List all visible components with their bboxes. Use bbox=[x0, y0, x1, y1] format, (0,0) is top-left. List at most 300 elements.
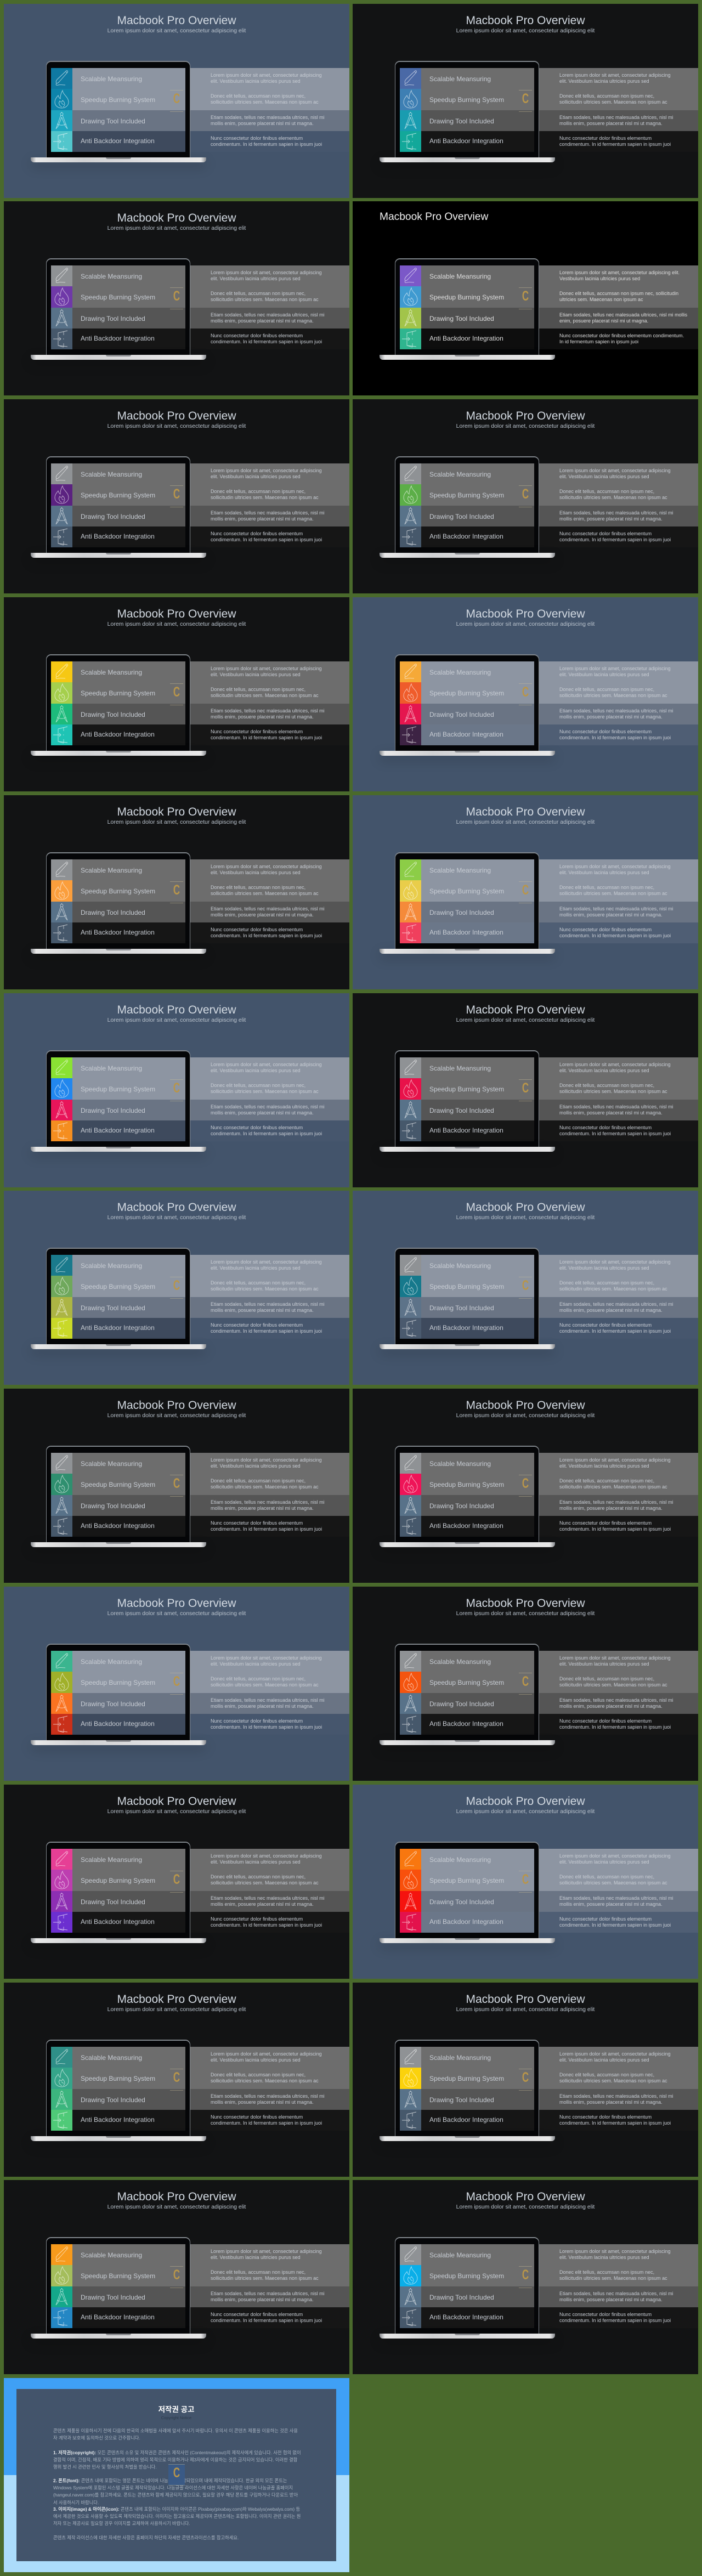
laptop bbox=[380, 2237, 555, 2339]
row: Anti Backdoor Integration: condimentum. In id fermentum sapien in ipsum juoi bbox=[559, 933, 671, 938]
heading: Macbook Pro Overview bbox=[466, 1993, 585, 2006]
row: Anti Backdoor Integration: In id fermentum sapien in ipsum juoi bbox=[559, 339, 638, 344]
row: Scalable Measuring: elit. Vestibulum lacinia ultricies purus sed bbox=[559, 1463, 649, 1469]
row: Speedup Burning System: sollicitudin ultricies sem. Maecenas non ipsum ac bbox=[211, 1682, 319, 1688]
row: Drawing Tool Included: mollis enim, posuere placerat nisl mi ut magna. bbox=[211, 318, 314, 324]
row: Speedup Burning System: Speedup Burning System bbox=[429, 96, 504, 104]
row: Scalable Measuring: elit. Vestibulum lacinia ultricies purus sed bbox=[559, 870, 649, 875]
row: Speedup Burning System: sollicitudin ultricies sem. Maecenas non ipsum ac bbox=[559, 1484, 667, 1490]
row: Anti Backdoor Integration: Nunc consectetur dolor finibus elementum bbox=[211, 135, 303, 141]
row: Anti Backdoor Integration bbox=[51, 1516, 349, 1537]
row: Anti Backdoor Integration: condimentum. In id fermentum sapien in ipsum juoi bbox=[211, 2120, 322, 2126]
row: Drawing Tool Included: Etiam sodales, tellus nec malesuada ultrices, nisl mi bbox=[559, 1499, 673, 1505]
row: Drawing Tool Included: mollis enim, posuere placerat nisl mi ut magna. bbox=[559, 121, 663, 126]
row: Anti Backdoor Integration: Nunc consectetur dolor finibus elementum bbox=[211, 1520, 303, 1526]
row: Scalable Measuring: elit. Vestibulum lacinia ultricies purus sed bbox=[211, 2057, 301, 2063]
row: Scalable Measuring: Scalable Meansuring bbox=[81, 867, 142, 874]
row: Speedup Burning System: sollicitudin ultricies sem. Maecenas non ipsum ac bbox=[211, 2078, 319, 2084]
row: Speedup Burning System bbox=[51, 880, 349, 902]
row: Anti Backdoor Integration: condimentum. In id fermentum sapien in ipsum juoi bbox=[211, 933, 322, 938]
panel: slide 15 bbox=[4, 1389, 349, 1583]
row: Anti Backdoor Integration: Anti Backdoor Integration bbox=[81, 137, 155, 145]
row: Anti Backdoor Integration bbox=[51, 329, 349, 349]
row: Drawing Tool Included bbox=[400, 1297, 698, 1318]
row: Anti Backdoor Integration: Anti Backdoor Integration bbox=[81, 1918, 155, 1926]
row: Scalable Measuring: Lorem ipsum dolor sit amet, consectetur adipiscing bbox=[559, 1457, 671, 1463]
watermark: C bbox=[522, 486, 529, 502]
row: Scalable Measuring bbox=[51, 1453, 349, 1474]
row: Drawing Tool Included: enim, posuere placerat nisl mi ut magna. bbox=[559, 318, 648, 324]
row: Drawing Tool Included bbox=[51, 1891, 349, 1912]
row: Speedup Burning System: Speedup Burning System bbox=[81, 2272, 155, 2280]
row: Speedup Burning System: Speedup Burning System bbox=[429, 491, 504, 499]
heading: Macbook Pro Overview bbox=[466, 1004, 585, 1016]
row: Anti Backdoor Integration: condimentum. In id fermentum sapien in ipsum juoi bbox=[211, 2318, 322, 2323]
row: Anti Backdoor Integration bbox=[400, 724, 698, 745]
row: Drawing Tool Included: mollis enim, posuere placerat nisl mi ut magna. bbox=[559, 1110, 663, 1116]
row: Scalable Measuring bbox=[400, 463, 698, 484]
row: Scalable Measuring: Lorem ipsum dolor sit amet, consectetur adipiscing bbox=[211, 2051, 322, 2057]
row: Scalable Measuring: Scalable Meansuring bbox=[429, 75, 491, 83]
row: Drawing Tool Included: Drawing Tool Included bbox=[81, 315, 145, 322]
row: Anti Backdoor Integration bbox=[51, 131, 349, 152]
row: Speedup Burning System: Donec elit tellus, accumsan non ipsum nec, bbox=[559, 489, 654, 494]
row: Anti Backdoor Integration bbox=[51, 724, 349, 745]
subheading: Lorem ipsum dolor sit amet, consectetur adipiscing elit bbox=[456, 2204, 595, 2210]
panel: slide 10 bbox=[353, 795, 698, 989]
row: Anti Backdoor Integration: Anti Backdoor Integration bbox=[81, 335, 155, 342]
row: Anti Backdoor Integration bbox=[51, 526, 349, 547]
row: Drawing Tool Included: mollis enim, posuere placerat nisl mi ut magna. bbox=[559, 2099, 663, 2105]
row: Anti Backdoor Integration: condimentum. In id fermentum sapien in ipsum juoi bbox=[211, 1724, 322, 1730]
row: Scalable Measuring: Lorem ipsum dolor sit amet, consectetur adipiscing bbox=[211, 1655, 322, 1661]
row: Anti Backdoor Integration: Nunc consectetur dolor finibus elementum bbox=[559, 2114, 652, 2120]
row: Anti Backdoor Integration: condimentum. In id fermentum sapien in ipsum juoi bbox=[211, 339, 322, 344]
row: Scalable Measuring bbox=[51, 68, 349, 89]
row: Anti Backdoor Integration: Nunc consectetur dolor finibus elementum bbox=[559, 1322, 652, 1328]
row: Drawing Tool Included bbox=[400, 704, 698, 724]
row: Scalable Measuring: Vestibulum lacinia ultricies purus sed bbox=[559, 276, 640, 281]
watermark bbox=[519, 2266, 532, 2288]
row: Scalable Measuring: Scalable Meansuring bbox=[429, 471, 491, 478]
heading: Macbook Pro Overview bbox=[117, 1004, 236, 1016]
row: Scalable Measuring: elit. Vestibulum lacinia ultricies purus sed bbox=[559, 2255, 649, 2260]
row: Drawing Tool Included: Etiam sodales, tellus nec malesuada ultrices, nisl mi bbox=[559, 1697, 673, 1703]
row: Drawing Tool Included bbox=[51, 2089, 349, 2110]
heading: Macbook Pro Overview bbox=[117, 14, 236, 27]
row: Scalable Measuring: Lorem ipsum dolor sit amet, consectetur adipiscing bbox=[559, 1853, 671, 1859]
row: Scalable Measuring: Scalable Meansuring bbox=[81, 1460, 142, 1468]
row: Drawing Tool Included: mollis enim, posuere placerat nisl mi ut magna. bbox=[211, 121, 314, 126]
subheading: Lorem ipsum dolor sit amet, consectetur adipiscing elit bbox=[456, 1610, 595, 1617]
copyright card bbox=[16, 2389, 336, 2561]
row: Scalable Measuring: Scalable Meansuring bbox=[429, 1856, 491, 1864]
row: Drawing Tool Included: Drawing Tool Included bbox=[81, 1502, 145, 1510]
row: Drawing Tool Included: mollis enim, posuere placerat nisl mi ut magna. bbox=[211, 2099, 314, 2105]
panel: slide 13 bbox=[4, 1191, 349, 1385]
row: Scalable Measuring: elit. Vestibulum lacinia ultricies purus sed bbox=[211, 78, 301, 84]
heading: Macbook Pro Overview bbox=[117, 2190, 236, 2203]
row: Drawing Tool Included bbox=[51, 704, 349, 724]
row: Speedup Burning System bbox=[51, 682, 349, 704]
row: Anti Backdoor Integration: condimentum. In id fermentum sapien in ipsum juoi bbox=[559, 2318, 671, 2323]
row: Scalable Measuring: Lorem ipsum dolor sit amet, consectetur adipiscing bbox=[211, 1259, 322, 1265]
row: Anti Backdoor Integration: Nunc consectetur dolor finibus elementum bbox=[211, 1916, 303, 1922]
row: Anti Backdoor Integration: condimentum. In id fermentum sapien in ipsum juoi bbox=[211, 1922, 322, 1928]
watermark: C bbox=[522, 91, 529, 106]
row: Anti Backdoor Integration: Anti Backdoor Integration bbox=[429, 731, 503, 738]
row: Speedup Burning System bbox=[400, 1276, 698, 1297]
row: Scalable Measuring: Scalable Meansuring bbox=[81, 1065, 142, 1072]
subheading: Lorem ipsum dolor sit amet, consectetur adipiscing elit bbox=[456, 1017, 595, 1023]
row: Speedup Burning System: Donec elit tellus, accumsan non ipsum nec, bbox=[559, 2072, 654, 2077]
watermark bbox=[519, 1079, 532, 1101]
row: Speedup Burning System: Donec elit tellus, accumsan non ipsum nec, bbox=[559, 2269, 654, 2275]
row: Drawing Tool Included bbox=[400, 110, 698, 131]
laptop bbox=[380, 456, 555, 558]
subheading: Lorem ipsum dolor sit amet, consectetur adipiscing elit bbox=[107, 2204, 246, 2210]
row: Drawing Tool Included: Etiam sodales, tellus nec malesuada ultrices, nisl mi bbox=[559, 2291, 673, 2296]
laptop bbox=[31, 2040, 206, 2141]
row: Speedup Burning System: sollicitudin ultricies sem. Maecenas non ipsum ac bbox=[211, 1089, 319, 1094]
row: Scalable Measuring: Scalable Meansuring bbox=[81, 471, 142, 478]
clause 2: 2. 폰트(font): 콘텐츠 내에 포함되는 영문 폰트는 네이버 나눔고딕 제작되었으며 내에 제작되었습니다. 한글 외의 모든 폰트는 Windows System에 포함된 시스템 글꼴로 제작되었습니다. 나눔글꼴 라이선스에 대한 자세한 사항은 네이버 나눔글꼴 홈페이지(hangeul.naver.com)를 참고하세요. 폰트는 콘텐츠와 함께 제공되지 않으므로, 필요할 경우 해당 폰트를 구입하거나 다운로드 받아서 사용하시기 바랍니다. bbox=[53, 2478, 298, 2505]
row: Speedup Burning System: Speedup Burning System bbox=[429, 887, 504, 895]
row: Scalable Measuring: elit. Vestibulum lacinia ultricies purus sed bbox=[559, 1661, 649, 1667]
watermark bbox=[170, 683, 183, 705]
row: Speedup Burning System: sollicitudin ultricies sem. Maecenas non ipsum ac bbox=[559, 1880, 667, 1886]
row: Drawing Tool Included bbox=[400, 506, 698, 526]
row: Speedup Burning System: Speedup Burning System bbox=[429, 1283, 504, 1290]
row: Speedup Burning System: Donec elit tellus, accumsan non ipsum nec, bbox=[211, 1478, 305, 1484]
laptop bbox=[31, 61, 206, 162]
laptop bbox=[380, 258, 555, 360]
row: Drawing Tool Included bbox=[400, 1495, 698, 1516]
row: Drawing Tool Included: Drawing Tool Included bbox=[429, 117, 494, 125]
row: Anti Backdoor Integration: Nunc consectetur dolor finibus elementum bbox=[559, 1916, 652, 1922]
row: Scalable Measuring bbox=[51, 463, 349, 484]
row: Speedup Burning System: sollicitudin ultricies sem. Maecenas non ipsum ac bbox=[559, 891, 667, 896]
row: Speedup Burning System bbox=[400, 1672, 698, 1693]
watermark bbox=[519, 1475, 532, 1497]
row: Speedup Burning System: Speedup Burning System bbox=[81, 491, 155, 499]
watermark: C bbox=[173, 1872, 180, 1887]
subheading: Lorem ipsum dolor sit amet, consectetur adipiscing elit bbox=[456, 2006, 595, 2013]
row: Drawing Tool Included bbox=[400, 2286, 698, 2307]
watermark bbox=[519, 1673, 532, 1695]
row: Speedup Burning System: sollicitudin ultricies sem. Maecenas non ipsum ac bbox=[559, 495, 667, 500]
row: Anti Backdoor Integration: Anti Backdoor Integration bbox=[429, 1720, 503, 1728]
row: Anti Backdoor Integration: Anti Backdoor Integration bbox=[429, 137, 503, 145]
row: Drawing Tool Included bbox=[400, 1891, 698, 1912]
row: Anti Backdoor Integration bbox=[51, 2307, 349, 2328]
row: Scalable Measuring: Scalable Meansuring bbox=[81, 1856, 142, 1864]
row: Anti Backdoor Integration: condimentum. In id fermentum sapien in ipsum juoi bbox=[211, 1131, 322, 1136]
row: Anti Backdoor Integration: Anti Backdoor Integration bbox=[81, 731, 155, 738]
row: Anti Backdoor Integration: Nunc consectetur dolor finibus elementum bbox=[211, 927, 303, 932]
row: Speedup Burning System: sollicitudin ultricies sem. Maecenas non ipsum ac bbox=[211, 99, 319, 105]
row: Anti Backdoor Integration: condimentum. In id fermentum sapien in ipsum juoi bbox=[559, 1922, 671, 1928]
clause 3: 3. 이미지(image) & 아이콘(icon): 콘텐츠 내에 포함되는 이미지와 아이콘은 Pixabay(pixabay.com)와 Webalys(webalys.com) 등에서 제공한 것으로 사용할 수 있도록 제작되었습니다. 이미지는 참고용으로 제공되며 콘텐츠에는 포함됩니다. 이미지 관련 권리는 원저자 또는 제공사로 필요할 경우 이미지를 교체하여 사용하시기 바랍니다. bbox=[53, 2506, 301, 2526]
row: Speedup Burning System: sollicitudin ultricies sem. Maecenas non ipsum ac bbox=[559, 2275, 667, 2281]
row: Anti Backdoor Integration bbox=[400, 2307, 698, 2328]
heading: Macbook Pro Overview bbox=[380, 211, 488, 223]
watermark bbox=[168, 2464, 185, 2486]
panel: slide 4 bbox=[353, 201, 698, 395]
row: Speedup Burning System bbox=[400, 2265, 698, 2286]
row: Anti Backdoor Integration: condimentum. In id fermentum sapien in ipsum juoi bbox=[559, 1328, 671, 1334]
row: Speedup Burning System bbox=[400, 1474, 698, 1495]
row: Speedup Burning System bbox=[400, 682, 698, 704]
row: Anti Backdoor Integration: Anti Backdoor Integration bbox=[81, 1720, 155, 1728]
heading: Macbook Pro Overview bbox=[117, 1597, 236, 1610]
row: Drawing Tool Included bbox=[400, 2089, 698, 2110]
row: Anti Backdoor Integration: Anti Backdoor Integration bbox=[429, 1522, 503, 1530]
laptop bbox=[380, 852, 555, 954]
row: Speedup Burning System bbox=[51, 2265, 349, 2286]
row: Drawing Tool Included: Drawing Tool Included bbox=[429, 2096, 494, 2104]
row: Drawing Tool Included: Etiam sodales, tellus nec malesuada ultrices, nisl mi bbox=[559, 906, 673, 911]
row: Scalable Measuring bbox=[51, 265, 349, 286]
row: Anti Backdoor Integration bbox=[400, 1318, 698, 1339]
heading: Macbook Pro Overview bbox=[117, 1795, 236, 1808]
row: Scalable Measuring: Scalable Meansuring bbox=[81, 75, 142, 83]
row: Anti Backdoor Integration: Nunc consectetur dolor finibus elementum condimentum. bbox=[559, 333, 684, 338]
row: Anti Backdoor Integration bbox=[51, 1120, 349, 1141]
panel: slide 9 bbox=[4, 795, 349, 989]
row: Anti Backdoor Integration bbox=[400, 526, 698, 547]
row: Anti Backdoor Integration bbox=[51, 1318, 349, 1339]
row: Speedup Burning System bbox=[400, 484, 698, 506]
row: Drawing Tool Included: Etiam sodales, tellus nec malesuada ultrices, nisl mi bbox=[211, 1895, 325, 1901]
row: Drawing Tool Included: mollis enim, posuere placerat nisl mi ut magna. bbox=[559, 1703, 663, 1709]
row: Drawing Tool Included: Drawing Tool Included bbox=[81, 711, 145, 718]
row: Drawing Tool Included bbox=[51, 902, 349, 922]
panel: slide 19 bbox=[4, 1785, 349, 1979]
panel: slide 8 bbox=[353, 597, 698, 791]
row: Scalable Measuring bbox=[51, 1849, 349, 1870]
row: Drawing Tool Included bbox=[400, 308, 698, 329]
row: Drawing Tool Included bbox=[51, 110, 349, 131]
watermark: C bbox=[173, 1674, 180, 1689]
row: Anti Backdoor Integration bbox=[51, 1912, 349, 1933]
watermark: C bbox=[522, 1476, 529, 1491]
row: Speedup Burning System: Donec elit tellus, accumsan non ipsum nec, bbox=[211, 1676, 305, 1682]
row: Speedup Burning System: Speedup Burning System bbox=[429, 2272, 504, 2280]
row: Scalable Measuring: elit. Vestibulum lacinia ultricies purus sed bbox=[211, 2255, 301, 2260]
row: Anti Backdoor Integration: Anti Backdoor Integration bbox=[81, 533, 155, 540]
panel: slide 6 bbox=[353, 399, 698, 593]
row: Drawing Tool Included: Etiam sodales, tellus nec malesuada ultrices, nisl mi bbox=[559, 510, 673, 516]
row: Drawing Tool Included: mollis enim, posuere placerat nisl mi ut magna. bbox=[559, 714, 663, 720]
row: Scalable Measuring: elit. Vestibulum lacinia ultricies purus sed bbox=[559, 1859, 649, 1865]
row: Drawing Tool Included: Drawing Tool Included bbox=[81, 1107, 145, 1114]
row: Speedup Burning System bbox=[400, 880, 698, 902]
row: Scalable Measuring: Lorem ipsum dolor sit amet, consectetur adipiscing bbox=[211, 468, 322, 473]
watermark: C bbox=[522, 1674, 529, 1689]
panel: slide 17 bbox=[4, 1587, 349, 1781]
row: Drawing Tool Included: Etiam sodales, tellus nec malesuada ultrices, nisl mi bbox=[211, 2291, 325, 2296]
row: Drawing Tool Included: Drawing Tool Included bbox=[429, 1502, 494, 1510]
row: Drawing Tool Included: Drawing Tool Included bbox=[429, 513, 494, 520]
row: Drawing Tool Included: mollis enim, posuere placerat nisl mi ut magna. bbox=[559, 516, 663, 522]
row: Drawing Tool Included: mollis enim, posuere placerat nisl mi ut magna. bbox=[211, 1110, 314, 1116]
row: Anti Backdoor Integration: Anti Backdoor Integration bbox=[429, 1126, 503, 1134]
watermark: C bbox=[173, 91, 180, 106]
laptop bbox=[31, 654, 206, 756]
closing line: 콘텐츠 제작 라이선스에 대한 자세한 사항은 홈페이지 하단의 자세한 콘텐츠라이선스를 참고하세요. bbox=[53, 2535, 239, 2540]
subheading: Lorem ipsum dolor sit amet, consectetur adipiscing elit bbox=[107, 1808, 246, 1815]
laptop bbox=[31, 1248, 206, 1349]
heading: Macbook Pro Overview bbox=[466, 1795, 585, 1808]
row: Anti Backdoor Integration: Nunc consectetur dolor finibus elementum bbox=[211, 1718, 303, 1724]
watermark bbox=[170, 485, 183, 507]
row: Speedup Burning System bbox=[400, 1078, 698, 1100]
row: Speedup Burning System bbox=[51, 286, 349, 308]
row: Drawing Tool Included: Etiam sodales, tellus nec malesuada ultrices, nisl mi bbox=[211, 312, 325, 318]
row: Speedup Burning System: Speedup Burning System bbox=[81, 2075, 155, 2082]
row: Drawing Tool Included bbox=[51, 308, 349, 329]
row: Speedup Burning System: Speedup Burning System bbox=[81, 1283, 155, 1290]
heading: Macbook Pro Overview bbox=[117, 1399, 236, 1412]
row: Speedup Burning System bbox=[400, 1870, 698, 1891]
row: Speedup Burning System: Donec elit tellus, accumsan non ipsum nec, bbox=[211, 885, 305, 890]
subheading: Lorem ipsum dolor sit amet, consectetur adipiscing elit bbox=[456, 1412, 595, 1419]
row: Speedup Burning System: sollicitudin ultricies sem. Maecenas non ipsum ac bbox=[211, 693, 319, 698]
row: Speedup Burning System: sollicitudin ultricies sem. Maecenas non ipsum ac bbox=[211, 1484, 319, 1490]
row: Anti Backdoor Integration: Anti Backdoor Integration bbox=[429, 1324, 503, 1332]
row: Drawing Tool Included: mollis enim, posuere placerat nisl mi ut magna. bbox=[211, 1307, 314, 1313]
row: Scalable Measuring: Lorem ipsum dolor sit amet, consectetur adipiscing bbox=[559, 1259, 671, 1265]
row: Drawing Tool Included: Etiam sodales, tellus nec malesuada ultrices, nisl mi bbox=[211, 906, 325, 911]
row: Drawing Tool Included: Drawing Tool Included bbox=[429, 1304, 494, 1312]
subheading: Lorem ipsum dolor sit amet, consectetur adipiscing elit bbox=[107, 27, 246, 34]
panel: slide 24 bbox=[353, 2180, 698, 2374]
row: Drawing Tool Included: Drawing Tool Included bbox=[429, 1107, 494, 1114]
row: Drawing Tool Included: mollis enim, posuere placerat nisl mi ut magna. bbox=[211, 912, 314, 918]
heading: Macbook Pro Overview bbox=[117, 410, 236, 422]
subheading: Lorem ipsum dolor sit amet, consectetur adipiscing elit bbox=[107, 1412, 246, 1419]
row: Speedup Burning System: Donec elit tellus, accumsan non ipsum nec, bbox=[559, 1083, 654, 1088]
watermark: C bbox=[173, 2465, 180, 2481]
row: Drawing Tool Included: Etiam sodales, tellus nec malesuada ultrices, nisl mi bbox=[559, 2093, 673, 2099]
row: Anti Backdoor Integration: Nunc consectetur dolor finibus elementum bbox=[211, 2312, 303, 2317]
watermark bbox=[519, 485, 532, 507]
row: Scalable Measuring bbox=[400, 1255, 698, 1276]
row: Speedup Burning System bbox=[51, 484, 349, 506]
panel: slide 20 bbox=[353, 1785, 698, 1979]
row: Speedup Burning System: Speedup Burning System bbox=[429, 689, 504, 697]
subheading: Lorem ipsum dolor sit amet, consectetur adipiscing elit bbox=[456, 621, 595, 627]
watermark: C bbox=[173, 1476, 180, 1491]
row: Speedup Burning System: sollicitudin ultricies sem. Maecenas non ipsum ac bbox=[559, 1089, 667, 1094]
row: Drawing Tool Included bbox=[51, 1297, 349, 1318]
row: Scalable Measuring bbox=[400, 1849, 698, 1870]
row: Speedup Burning System bbox=[51, 1078, 349, 1100]
heading: Macbook Pro Overview bbox=[466, 1597, 585, 1610]
laptop bbox=[31, 1050, 206, 1152]
row: Anti Backdoor Integration: condimentum. In id fermentum sapien in ipsum juoi bbox=[211, 1328, 322, 1334]
row: Anti Backdoor Integration: condimentum. In id fermentum sapien in ipsum juoi bbox=[559, 1724, 671, 1730]
row: Anti Backdoor Integration: Anti Backdoor Integration bbox=[81, 1126, 155, 1134]
row: Speedup Burning System: sollicitudin ultricies sem. Maecenas non ipsum ac bbox=[211, 2275, 319, 2281]
watermark: C bbox=[522, 2267, 529, 2283]
row: Anti Backdoor Integration bbox=[400, 1714, 698, 1735]
row: Speedup Burning System: ultricies sem. Maecenas non ipsum ac bbox=[559, 297, 643, 302]
row: Scalable Measuring: Lorem ipsum dolor sit amet, consectetur adipiscing bbox=[211, 72, 322, 78]
row: Speedup Burning System bbox=[51, 2068, 349, 2089]
row: Scalable Measuring: elit. Vestibulum lacinia ultricies purus sed bbox=[559, 78, 649, 84]
laptop bbox=[380, 654, 555, 756]
row: Speedup Burning System: Speedup Burning System bbox=[429, 293, 504, 301]
row: Drawing Tool Included: mollis enim, posuere placerat nisl mi ut magna. bbox=[211, 714, 314, 720]
row: Anti Backdoor Integration: Anti Backdoor Integration bbox=[81, 1324, 155, 1332]
row: Speedup Burning System: Donec elit tellus, accumsan non ipsum nec, bbox=[559, 1676, 654, 1682]
row: Anti Backdoor Integration: Nunc consectetur dolor finibus elementum bbox=[559, 531, 652, 536]
watermark bbox=[519, 1871, 532, 1893]
row: Drawing Tool Included: mollis enim, posuere placerat nisl mi ut magna. bbox=[211, 516, 314, 522]
row: Scalable Measuring: elit. Vestibulum lacinia ultricies purus sed bbox=[211, 1859, 301, 1865]
row: Anti Backdoor Integration bbox=[400, 1912, 698, 1933]
row: Scalable Measuring bbox=[400, 1057, 698, 1078]
subheading: Lorem ipsum dolor sit amet, consectetur adipiscing elit bbox=[107, 2006, 246, 2013]
row: Drawing Tool Included: mollis enim, posuere placerat nisl mi ut magna. bbox=[559, 1505, 663, 1511]
row: Scalable Measuring: Scalable Meansuring bbox=[81, 669, 142, 676]
row: Drawing Tool Included bbox=[400, 902, 698, 922]
row: Speedup Burning System: Donec elit tellus, accumsan non ipsum nec, bbox=[559, 1280, 654, 1286]
row: Speedup Burning System bbox=[51, 1276, 349, 1297]
row: Scalable Measuring: elit. Vestibulum lacinia ultricies purus sed bbox=[211, 1068, 301, 1073]
heading: Macbook Pro Overview bbox=[466, 806, 585, 818]
row: Speedup Burning System: Donec elit tellus, accumsan non ipsum nec, bbox=[559, 1874, 654, 1879]
row: Anti Backdoor Integration: condimentum. In id fermentum sapien in ipsum juoi bbox=[211, 735, 322, 740]
row: Anti Backdoor Integration bbox=[51, 2110, 349, 2131]
row: Speedup Burning System: sollicitudin ultricies sem. Maecenas non ipsum ac bbox=[211, 495, 319, 500]
row: Drawing Tool Included: mollis enim, posuere placerat nisl mi ut magna. bbox=[211, 1505, 314, 1511]
watermark: C bbox=[522, 1872, 529, 1887]
row: Speedup Burning System: Speedup Burning System bbox=[81, 689, 155, 697]
watermark: C bbox=[522, 1278, 529, 1293]
clause 1: 1. 저작권(copyright): 모든 콘텐츠의 소유 및 저작권은 콘텐츠 제작사인 (Contentmakeout)의 제작사에게 있습니다. 사전 협의 없이 결합적 이며, 간접적, 배포 기타 방법에 의하여 영리 목적으로 이용하거나 제3자에게 이용하는 것은 금지되어 있습니다. 이러한 결합 행위 발견 시 관련한 민사 및 형사상의 처벌을 받습니다. bbox=[53, 2450, 301, 2470]
row: Anti Backdoor Integration: condimentum. In id fermentum sapien in ipsum juoi bbox=[559, 141, 671, 147]
watermark: C bbox=[173, 2070, 180, 2085]
row: Anti Backdoor Integration: Nunc consectetur dolor finibus elementum bbox=[559, 135, 652, 141]
watermark: C bbox=[173, 1080, 180, 1096]
row: Drawing Tool Included: Etiam sodales, tellus nec malesuada ultrices, nisl mi bbox=[211, 1499, 325, 1505]
row: Scalable Measuring: Lorem ipsum dolor sit amet, consectetur adipiscing elit. bbox=[559, 270, 680, 275]
watermark bbox=[170, 1673, 183, 1695]
watermark bbox=[170, 1079, 183, 1101]
heading: Macbook Pro Overview bbox=[466, 410, 585, 422]
laptop bbox=[31, 852, 206, 954]
row: Speedup Burning System bbox=[400, 89, 698, 110]
subheading: Lorem ipsum dolor sit amet, consectetur adipiscing elit bbox=[107, 1017, 246, 1023]
heading: 저작권 공고 bbox=[158, 2405, 194, 2414]
subheading: Lorem ipsum dolor sit amet, consectetur adipiscing elit bbox=[107, 1214, 246, 1221]
row: Anti Backdoor Integration: Nunc consectetur dolor finibus elementum bbox=[559, 729, 652, 734]
row: Anti Backdoor Integration bbox=[400, 1516, 698, 1537]
subheading: Lorem ipsum dolor sit amet, consectetur adipiscing elit bbox=[107, 423, 246, 429]
heading: Macbook Pro Overview bbox=[117, 608, 236, 620]
row: Speedup Burning System: Donec elit tellus, accumsan non ipsum nec, bbox=[211, 2269, 305, 2275]
row: Scalable Measuring: Scalable Meansuring bbox=[81, 2054, 142, 2062]
row: Speedup Burning System: sollicitudin ultricies sem. Maecenas non ipsum ac bbox=[211, 891, 319, 896]
watermark: C bbox=[173, 1278, 180, 1293]
watermark bbox=[170, 881, 183, 903]
row: Speedup Burning System: Speedup Burning System bbox=[81, 1481, 155, 1488]
watermark bbox=[170, 1277, 183, 1299]
row: Scalable Measuring: Scalable Meansuring bbox=[429, 669, 491, 676]
